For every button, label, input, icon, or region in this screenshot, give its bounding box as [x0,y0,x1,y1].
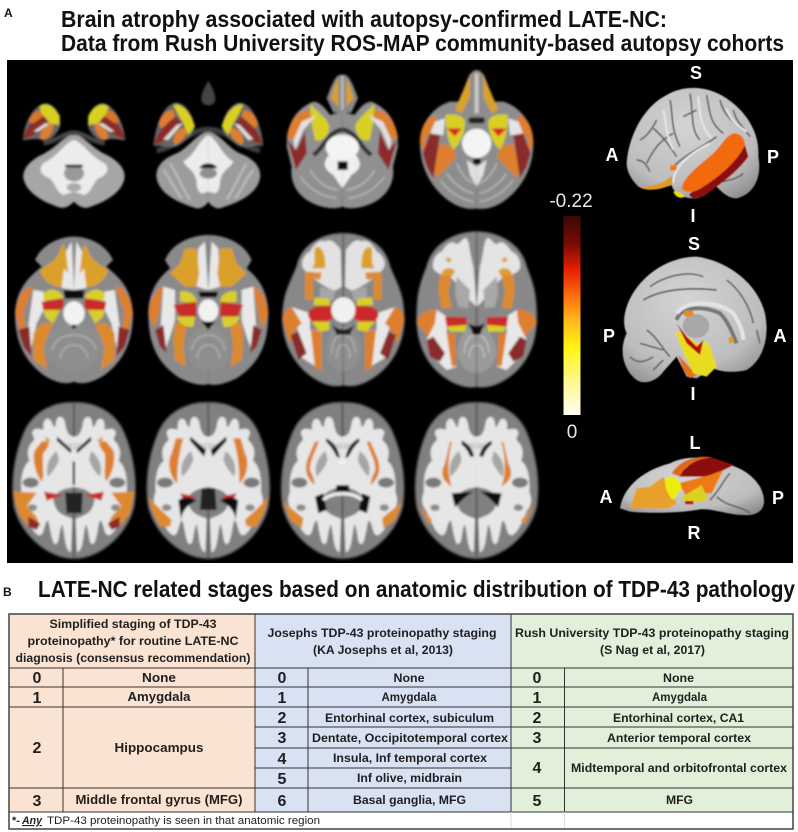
slice 11 [281,403,404,558]
panel: brain imaging [7,60,793,563]
column 2: Josephs staging: Inf olive, midbrain [357,773,462,785]
colorbar: -0.22 [549,191,593,212]
orientation labels: P [767,147,779,167]
column 1: simplified staging: 3 [33,793,42,810]
orientation labels: S [690,63,702,83]
brain slices: left columns [13,81,270,558]
column 3: Rush University staging: (S Nag et al, 2017) [600,645,705,657]
3D brain: medial view [623,257,767,382]
slice 3 [287,75,398,208]
orientation labels: A [600,487,612,507]
column 2: Josephs staging: 2 [278,710,287,727]
brain slices: right columns [281,70,538,558]
footnote: *- [12,815,20,827]
column 3: Rush University staging: 3 [533,730,542,747]
column 1: simplified staging: 2 [33,740,42,757]
column 1: simplified staging: Simplified staging of TDP-43 [50,619,216,631]
footnote: TDP-43 proteinopathy is seen in that anatomic region [47,815,320,827]
column 3: Rush University staging: 4 [533,760,542,777]
grid lines [9,614,793,829]
column 3: Rush University staging: None [663,673,694,685]
column 2: Josephs staging: 5 [278,771,287,788]
column 3: Rush University staging: 0 [533,670,542,687]
3D brain: inferior view [620,457,764,515]
column 3: Rush University staging: 5 [533,793,542,810]
column 1: simplified staging [16,619,251,810]
slice 5 [15,237,133,383]
column 1: simplified staging: Middle frontal gyrus (MFG) [76,792,242,807]
footnote: Any [21,815,43,827]
column 1: simplified staging: None [142,670,176,685]
orientation labels: I [690,384,696,404]
column 3: Rush University staging: Midtemporal and orbitofrontal cortex [571,763,788,775]
column backgrounds [9,614,793,812]
column 2: Josephs staging: 6 [278,793,287,810]
colorbar: 0 [567,422,577,443]
column 3: Rush University staging: Rush University TDP-43 proteinopathy staging [515,628,789,640]
column 3: Rush University staging: 1 [533,690,542,707]
title [61,6,784,56]
orientation labels: S [688,234,700,254]
column 2: Josephs staging: Basal ganglia, MFG [353,795,466,807]
column 2: Josephs staging: 4 [278,751,287,768]
column 2: Josephs staging: Insula, Inf temporal cortex [333,753,488,765]
column 2: Josephs staging: Josephs TDP-43 proteinopathy staging [268,628,496,640]
title: Brain atrophy associated with autopsy-confirmed LATE-NC: [61,6,667,32]
slice 1 [23,103,125,208]
column 1: simplified staging: diagnosis (consensus recommendation) [16,653,251,665]
orientation labels [600,63,786,543]
column 3: Rush University staging: Amygdala [652,692,708,704]
slice 4 [420,70,533,209]
column 3: Rush University staging: Entorhinal cortex, CA1 [613,713,745,725]
column 3: Rush University staging: 2 [533,710,542,727]
column 2: Josephs staging: Dentate, Occipitotemporal cortex [312,733,509,745]
panel B label: B [3,585,12,599]
orientation labels: A [774,326,786,346]
column 2: Josephs staging: Amygdala [382,692,437,704]
column 2: Josephs staging: (KA Josephs et al, 2013) [313,645,453,657]
column 1: simplified staging: 0 [33,670,42,687]
orientation labels: P [772,488,784,508]
orientation labels: I [690,206,696,226]
slice 6 [148,235,268,385]
orientation labels: R [688,523,700,543]
orientation labels: A [606,145,618,165]
slice 8 [417,232,537,387]
column 3: Rush University staging [515,628,789,810]
column 2: Josephs staging: None [394,673,424,685]
panel A label: A [4,6,13,20]
column 2: Josephs staging: Entorhinal cortex, subiculum [325,713,494,725]
slice 9 [13,403,135,558]
slice 10 [147,403,270,558]
column 1: simplified staging: Hippocampus [114,740,204,755]
column 1: simplified staging: proteinopathy* for routine LATE-NC [28,636,238,648]
column 1: simplified staging: 1 [33,690,42,707]
column 2: Josephs staging: 1 [278,690,287,707]
slice 12 [415,403,538,558]
column 3: Rush University staging: MFG [666,795,693,807]
row 3 slices 11 and 12 [281,403,538,558]
column 3: Rush University staging: Anterior temporal cortex [607,733,752,745]
slice 7 [282,233,404,386]
table: staging comparison [9,614,793,829]
orientation labels: L [690,433,700,453]
column 2: Josephs staging: 3 [278,730,287,747]
slice 2 [153,81,263,208]
column 2: Josephs staging [268,628,509,810]
3D brain: lateral view [627,88,759,198]
column 1: simplified staging: Amygdala [128,689,191,704]
orientation labels: P [603,326,615,346]
colorbar [549,191,593,443]
column 2: Josephs staging: 0 [278,670,287,687]
row 3 slices 9 and 10 [13,403,270,558]
